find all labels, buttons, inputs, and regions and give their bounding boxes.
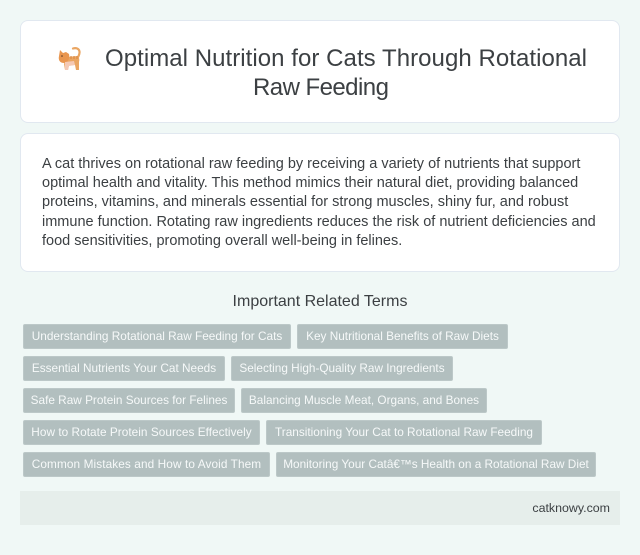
title: Optimal Nutrition for Cats Through Rotational (105, 45, 587, 72)
tag (276, 452, 596, 477)
tag: Balancing Muscle Meat, Organs, and Bones (249, 393, 479, 407)
tag (241, 388, 487, 413)
description text: optimal health and vitality. This method mimics their natural diet, providing balanced (42, 175, 578, 191)
heading: important related terms: Important Related Terms (233, 293, 407, 310)
tag (23, 324, 291, 349)
footer source text: catknowy.com (532, 501, 610, 515)
tag (23, 420, 260, 445)
tag: Monitoring Your Catâ€™s Health on a Rotational Raw Diet (283, 457, 589, 471)
title: Raw Feeding (253, 74, 388, 101)
description text: immune function. Rotating raw ingredients reduces the risk of nutrient deficiencies and (42, 214, 596, 230)
title (105, 45, 587, 101)
panel: title card (20, 20, 620, 123)
footer bar (20, 491, 620, 525)
tag (297, 324, 508, 349)
description text: proteins, vitamins, and minerals essential for strong muscles, shiny fur, and robust (42, 194, 568, 210)
description text: A cat thrives on rotational raw feeding by receiving a variety of nutrients that support (42, 156, 580, 172)
panel: related term tags (23, 324, 596, 477)
tag (23, 388, 235, 413)
tag (231, 356, 453, 381)
panel: description (20, 133, 620, 272)
icon: cat (58, 47, 81, 70)
tag: Common Mistakes and How to Avoid Them (32, 457, 261, 471)
tag: Understanding Rotational Raw Feeding for Cats (32, 329, 282, 343)
tag (266, 420, 542, 445)
tag: How to Rotate Protein Sources Effectively (31, 425, 252, 439)
tag: Selecting High-Quality Raw Ingredients (239, 361, 445, 375)
description text (42, 156, 596, 249)
tag: Essential Nutrients Your Cat Needs (32, 361, 216, 375)
tag (23, 356, 225, 381)
tag: Transitioning Your Cat to Rotational Raw Feeding (275, 425, 533, 439)
tag: Key Nutritional Benefits of Raw Diets (306, 329, 499, 343)
tag: Safe Raw Protein Sources for Felines (31, 393, 227, 407)
description text: food sensitivities, promoting overall well-being in felines. (42, 233, 402, 249)
tag (23, 452, 270, 477)
